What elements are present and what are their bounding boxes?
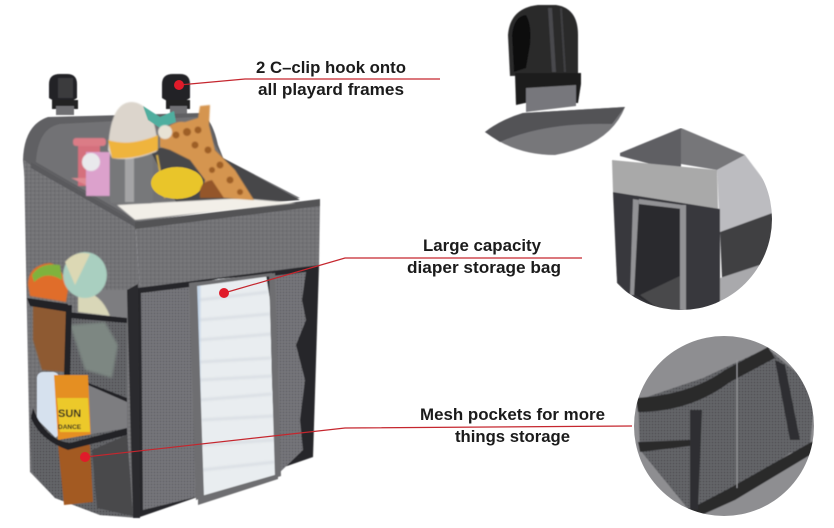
right mesh window [273, 272, 306, 475]
bottles in lower pocket [37, 372, 91, 440]
callout 2: storage bag [219, 237, 582, 298]
baby bottle [108, 102, 165, 203]
pacifier [143, 106, 176, 128]
front storage panel [137, 265, 319, 518]
diaper stack top visible in tray [117, 198, 296, 220]
upper mesh pockets [27, 298, 127, 440]
callout 2: storage bag: Large capacity [423, 237, 542, 255]
product: hanging organizer bag [23, 74, 320, 518]
left C-clip hook [49, 74, 78, 115]
tray interior [36, 117, 300, 222]
side fabric edge [90, 290, 127, 318]
bottles in lower pocket: SUN [58, 408, 81, 420]
pink bottle [71, 138, 110, 196]
yellow egg toy [151, 167, 203, 199]
left mesh window [141, 287, 196, 510]
detail circle: bag interior [612, 128, 775, 312]
side panel of bag [24, 160, 140, 518]
callout 3: mesh pockets: Mesh pockets for more [420, 406, 605, 424]
upper fabric band: left flap [31, 162, 140, 288]
callout 1: hook: all playard frames [258, 81, 404, 99]
callout 2: storage bag: diaper storage bag [407, 259, 561, 277]
toys in upper pockets [28, 252, 110, 372]
detail image: C-clip [485, 5, 625, 155]
giraffe plush [158, 105, 254, 200]
window gray borders [189, 282, 204, 500]
bag corner edge binding [127, 284, 140, 518]
callout 1: hook [174, 59, 440, 99]
callout 3: mesh pockets: things storage [455, 428, 570, 446]
upper fabric band: front [135, 200, 320, 288]
right C-clip hook [162, 74, 190, 115]
detail circle: mesh pocket [634, 336, 814, 516]
callout 1: hook: 2 C–clip hook onto [256, 59, 406, 77]
lower mesh pocket [30, 408, 133, 517]
diapers through clear window [196, 275, 276, 497]
callout 3: mesh pockets [80, 406, 632, 462]
bottles in lower pocket: DANCE [58, 424, 82, 431]
back panel [23, 113, 226, 240]
